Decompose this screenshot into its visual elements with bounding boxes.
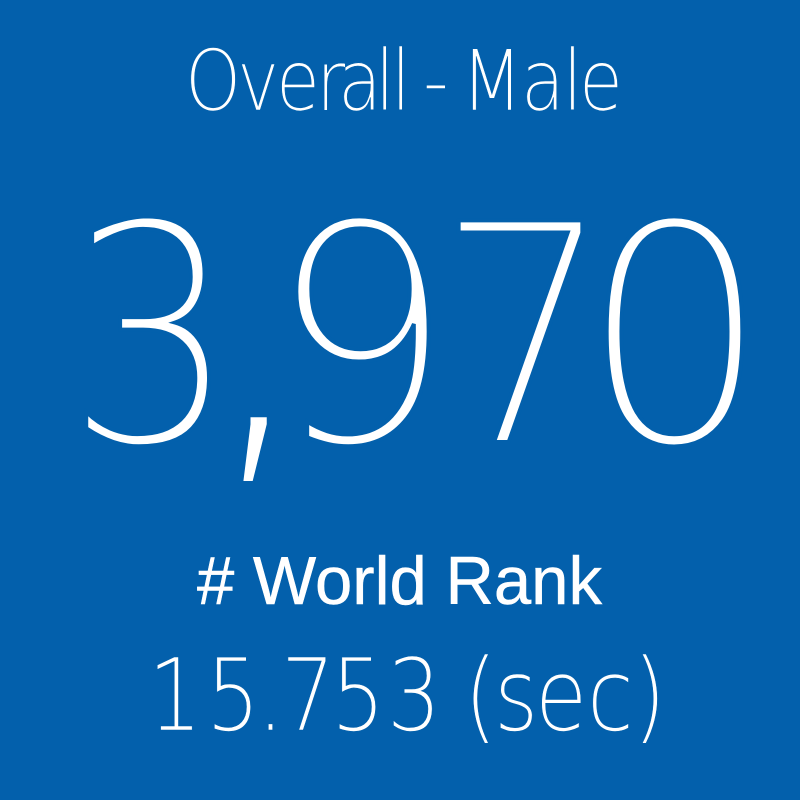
value: time in seconds: 15.753 (sec) [148, 637, 666, 754]
main number: world rank value: , [200, 97, 318, 527]
title: Overall - Male [185, 33, 623, 130]
main number: world rank value: 0 [580, 160, 770, 514]
label: world rank: # World Rank [197, 543, 603, 619]
main number: world rank value: 3 [66, 160, 237, 514]
main number: world rank value: 7 [436, 160, 613, 514]
main number: world rank value: 9 [268, 160, 454, 514]
